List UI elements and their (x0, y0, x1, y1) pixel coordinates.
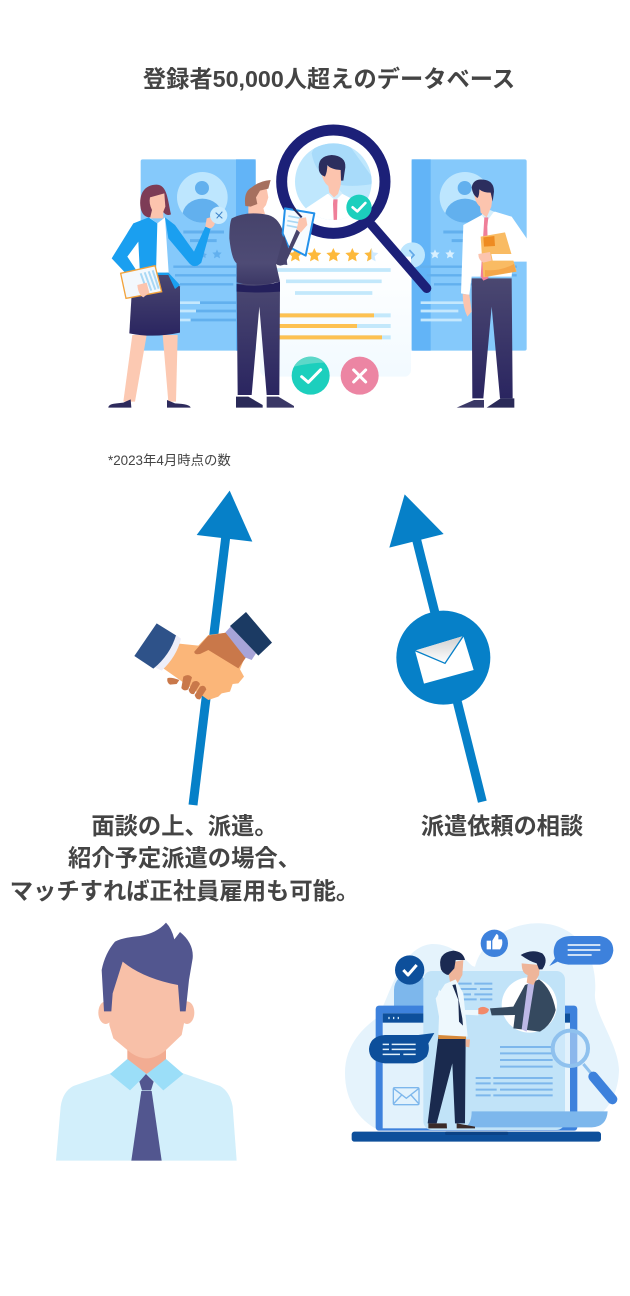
illustration: job seeker portrait (56, 923, 237, 1161)
person: man with folder (457, 179, 532, 408)
caption: interview and dispatch (10, 813, 359, 904)
caption: dispatch request: 派遣依頼の相談 (421, 813, 583, 839)
arrow: right upward with envelope (389, 494, 490, 802)
caption: interview and dispatch: マッチすれば正社員雇用も可能。 (10, 878, 359, 904)
icon: approved badge (346, 195, 372, 220)
person: man with clipboard (229, 180, 294, 408)
icon: accept (292, 357, 330, 395)
right profile card (400, 159, 527, 351)
illustration: candidate database (108, 130, 532, 408)
icon: magnifier (553, 1031, 612, 1099)
resume sheet with ratings (260, 248, 411, 395)
icon: envelope (396, 611, 490, 705)
speech bubble: top right (549, 936, 613, 966)
illustration: business matching (345, 923, 619, 1142)
held clipboard (276, 208, 314, 266)
icon: reject (341, 357, 379, 395)
icon: thumbs up (481, 930, 508, 957)
footnote: *2023年4月時点の数 (108, 453, 231, 468)
person: woman with clipboard (108, 185, 227, 408)
icon: check badge (395, 955, 424, 985)
arrow: left upward with handshake (134, 491, 272, 805)
laptop base (352, 1111, 608, 1142)
magnifying glass with candidate (282, 130, 427, 288)
speech bubble: left (369, 1033, 434, 1063)
left profile card (141, 159, 256, 351)
background blob (345, 923, 619, 1130)
person: man in portrait circle (490, 951, 557, 1033)
caption: interview and dispatch: 面談の上、派遣。 (91, 813, 278, 839)
tablet window (376, 971, 577, 1131)
caption: interview and dispatch: 紹介予定派遣の場合、 (68, 845, 301, 871)
person: man in white shirt (428, 951, 489, 1128)
title: 登録者50,000人超えのデータベース (143, 66, 515, 92)
icon: handshake (134, 612, 272, 700)
